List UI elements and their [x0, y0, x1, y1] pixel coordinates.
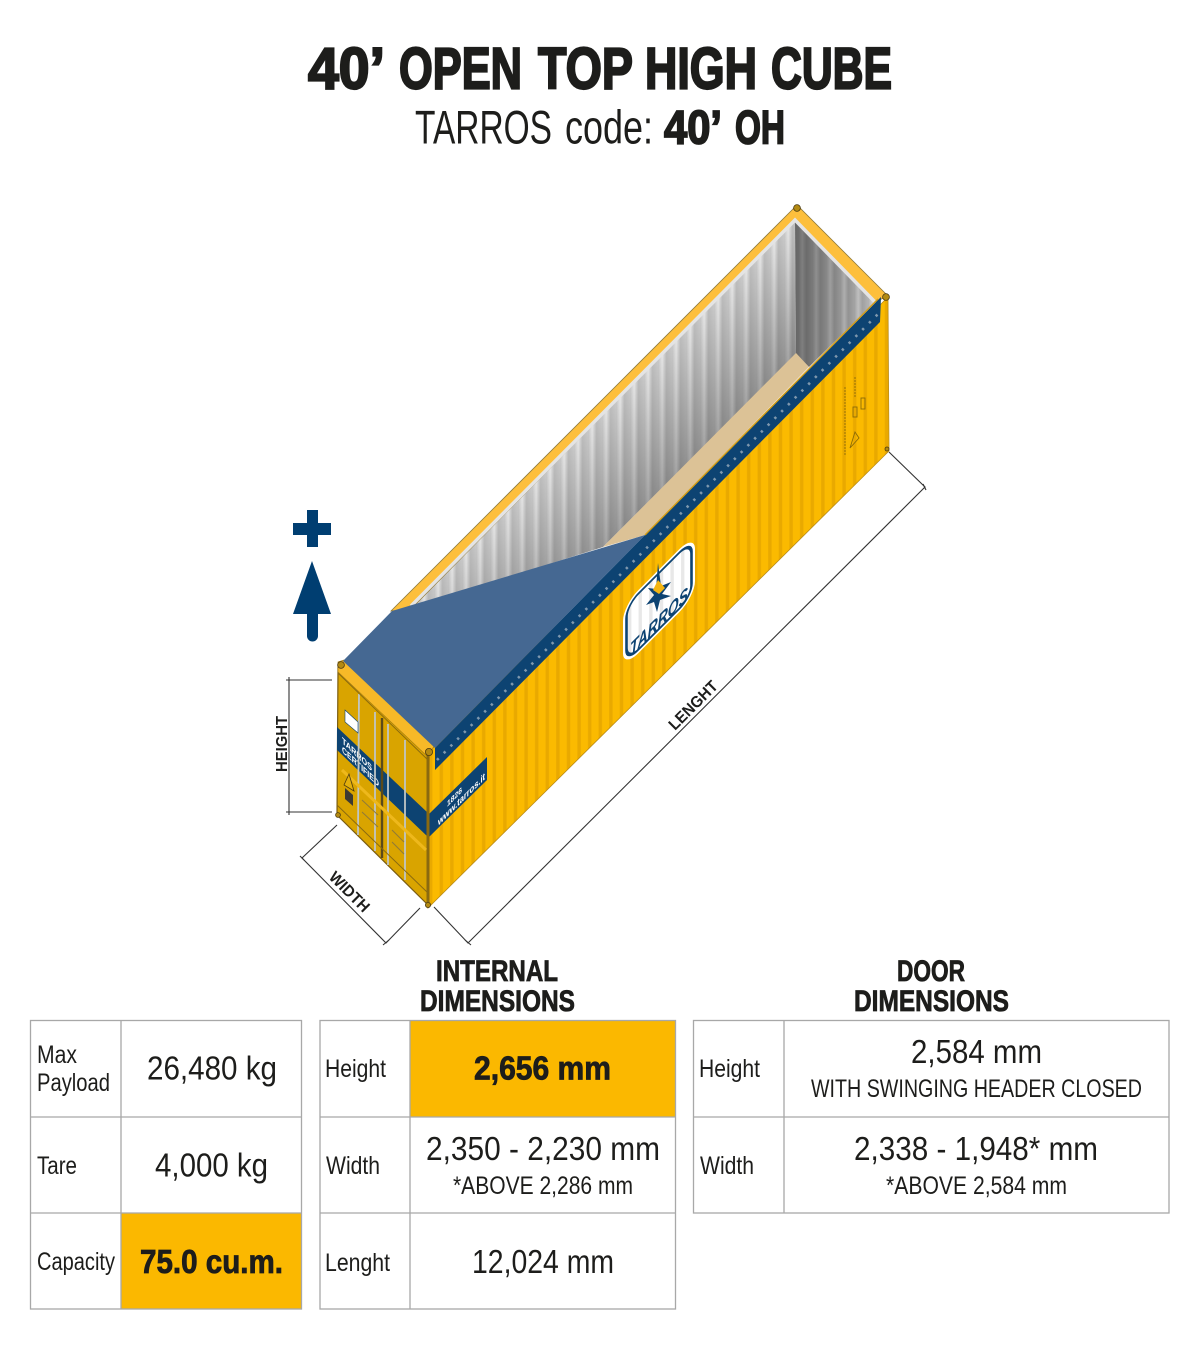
- front top rail: [338, 660, 434, 757]
- heading: door dimensions: DIMENSIONS: [854, 985, 1009, 1018]
- Tarros logo: TARROS: [630, 582, 688, 661]
- subtitle: OH: [735, 100, 785, 154]
- front door face: [337, 668, 429, 905]
- interior back wall: [795, 220, 875, 367]
- corner castings: [336, 205, 889, 908]
- side safety marks: [845, 377, 865, 455]
- row: capacity: 75.0 cu.m.: [140, 1243, 283, 1280]
- blue tarp band: [435, 297, 881, 770]
- row: tare: Tare: [37, 1152, 77, 1180]
- title: OPEN: [399, 36, 522, 102]
- row: door height: 2,584 mm: [911, 1033, 1042, 1070]
- heading: internal dimensions: [420, 955, 575, 1018]
- row: door width: Width: [700, 1152, 754, 1180]
- side wall: [428, 297, 889, 908]
- title: TOP: [538, 36, 633, 102]
- Tarros logo: [624, 536, 694, 666]
- row: max payload: 26,480 kg: [147, 1050, 277, 1086]
- front blue band: CERTIFIED: [342, 745, 379, 790]
- row: door width: *ABOVE 2,584 mm: [886, 1172, 1067, 1200]
- row: max payload: Max: [37, 1041, 77, 1069]
- side blue band: [428, 757, 487, 838]
- door small logo: [345, 710, 358, 733]
- row: door height: [699, 1033, 1142, 1103]
- row: max payload: [37, 1041, 277, 1097]
- container illustration: [336, 205, 889, 908]
- row: internal width: 2,350 - 2,230 mm: [426, 1130, 660, 1167]
- row: internal width: *ABOVE 2,286 mm: [453, 1172, 633, 1200]
- side blue band: www.tarros.it: [437, 770, 485, 829]
- interior left wall: [410, 220, 796, 608]
- row: capacity: [37, 1243, 283, 1280]
- dimension: width: WIDTH: [325, 869, 373, 916]
- side blue band: 1826: [447, 785, 462, 809]
- row: max payload: Payload: [37, 1069, 110, 1097]
- plus sign: [293, 510, 331, 547]
- open top rail: [391, 205, 888, 611]
- subtitle: TARROS: [415, 100, 552, 154]
- dimension: height: HEIGHT: [274, 716, 291, 772]
- heading: door dimensions: DOOR: [897, 955, 965, 988]
- band eyelets: [437, 313, 879, 760]
- row: door width: [700, 1130, 1098, 1200]
- heading: door dimensions: [854, 955, 1009, 1018]
- subtitle: code:: [565, 100, 653, 154]
- door warning marks: [344, 774, 354, 806]
- row: internal width: [326, 1130, 660, 1200]
- heading: internal dimensions: INTERNAL: [436, 955, 558, 988]
- title: HIGH: [645, 36, 757, 102]
- dimension: length: [434, 452, 926, 945]
- title: [308, 36, 892, 102]
- front blue band: [337, 727, 428, 837]
- row: internal length: 12,024 mm: [472, 1243, 614, 1280]
- subtitle: 40’: [664, 100, 722, 154]
- row: internal width: Width: [326, 1152, 380, 1180]
- table: door dimensions: [693, 1020, 1169, 1213]
- row: capacity: Capacity: [37, 1248, 115, 1276]
- row: internal length: Lenght: [325, 1249, 390, 1277]
- row: internal height: [325, 1050, 611, 1086]
- row: tare: [37, 1146, 268, 1184]
- front blue band: TARROS: [342, 736, 372, 774]
- title: 40’: [308, 36, 385, 102]
- tarpaulin cover: [343, 535, 645, 748]
- dimension: height: [274, 677, 332, 815]
- row: internal height: Height: [325, 1055, 386, 1083]
- door details: [337, 673, 428, 905]
- row: internal length: [325, 1243, 614, 1280]
- heading: internal dimensions: DIMENSIONS: [420, 985, 575, 1018]
- row: internal height: 2,656 mm: [474, 1050, 611, 1086]
- table: payload: [30, 1020, 302, 1309]
- row: tare: 4,000 kg: [155, 1146, 268, 1184]
- row: door height: Height: [699, 1055, 760, 1083]
- wooden floor: [603, 353, 809, 547]
- dimension: width: [300, 825, 420, 945]
- row: door width: 2,338 - 1,948* mm: [854, 1130, 1098, 1167]
- title: CUBE: [771, 36, 892, 102]
- dimension: length: LENGHT: [666, 678, 722, 734]
- subtitle: [415, 100, 785, 154]
- up arrow: [293, 561, 331, 642]
- table: internal dimensions: [320, 1020, 676, 1309]
